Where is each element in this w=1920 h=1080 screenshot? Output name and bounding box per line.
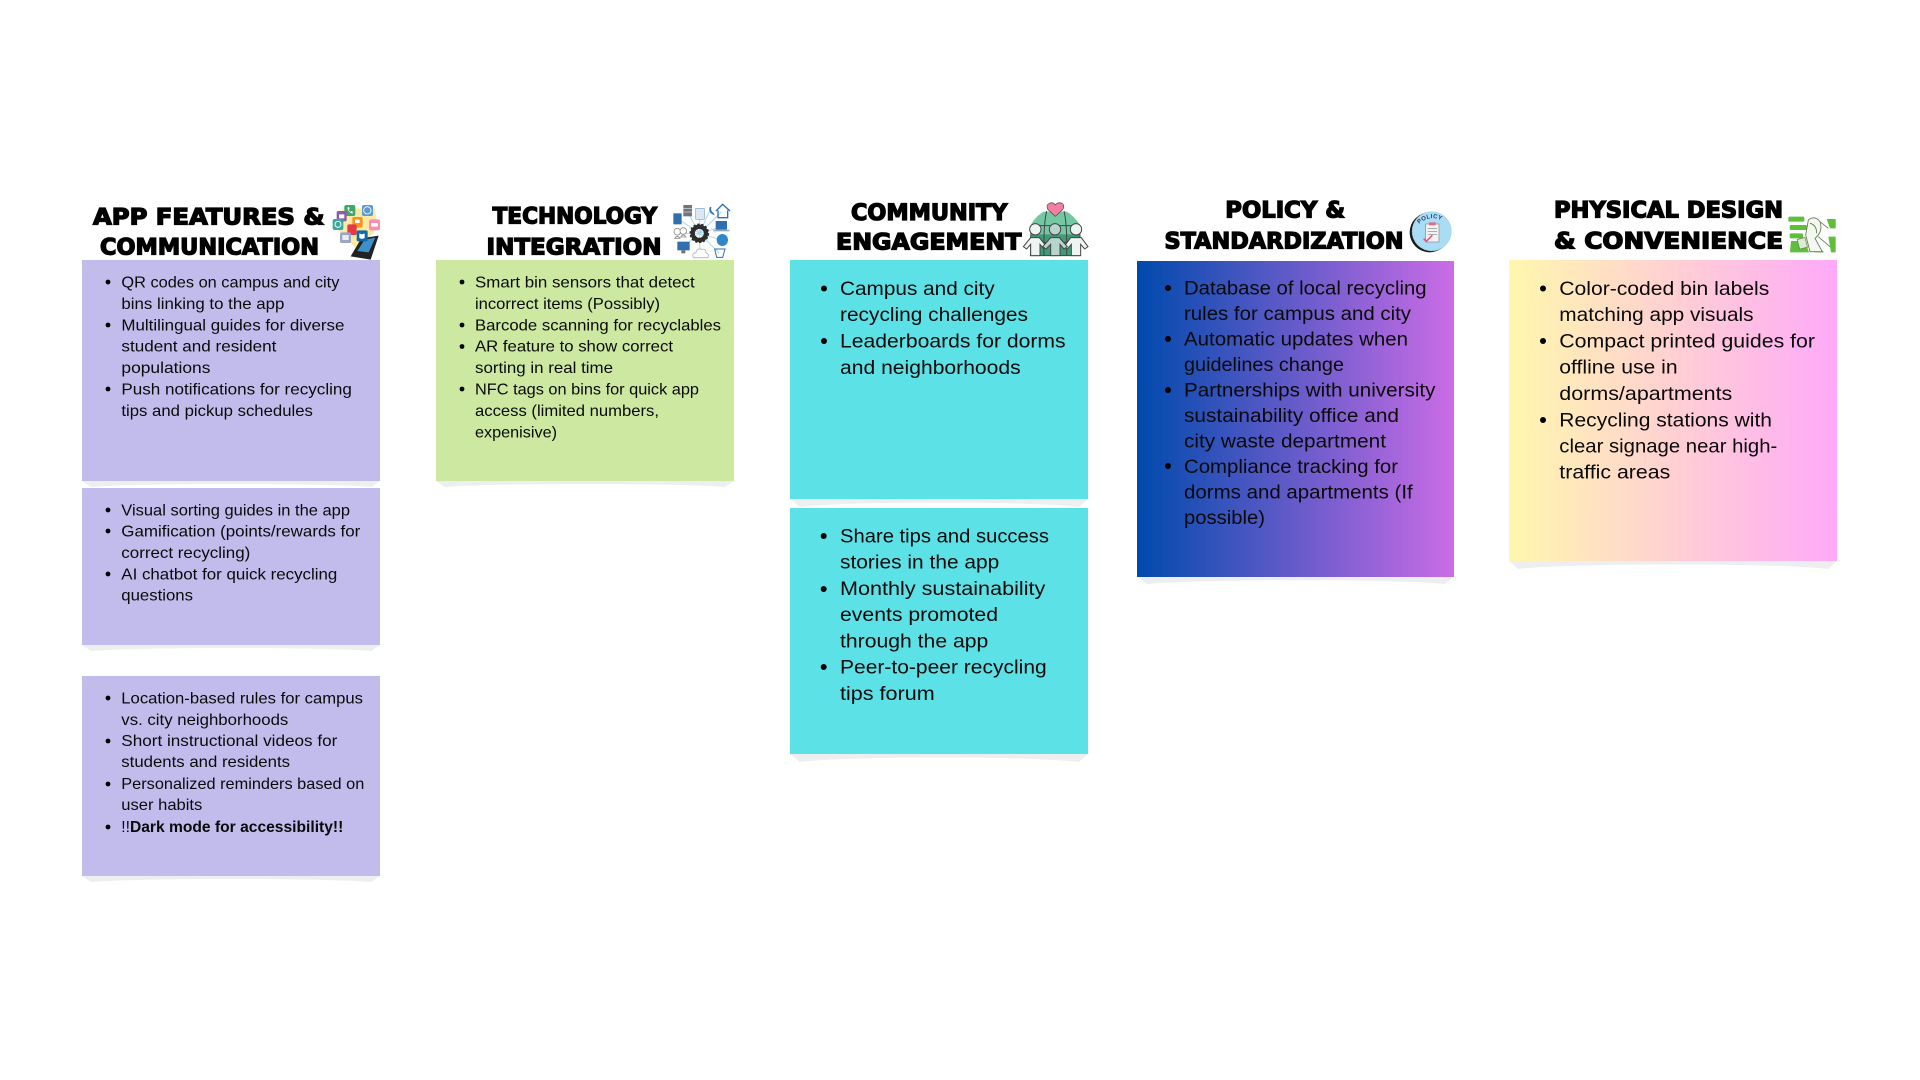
bullet list: Color-coded bin labels — [1559, 278, 1770, 300]
panel: technology integration card — [436, 260, 734, 487]
bullet list: and neighborhoods — [840, 357, 1021, 379]
bullet list: user habits — [121, 797, 202, 814]
panel: app features card 3 — [82, 676, 380, 882]
bullet list: Recycling stations with — [1559, 409, 1772, 431]
icon: policy clipboard badge — [1410, 211, 1452, 252]
bullet list: AI chatbot for quick recycling — [121, 566, 337, 583]
column: community engagement — [790, 201, 1088, 762]
bullet list: Push notifications for recycling — [121, 382, 352, 398]
panel: app features card 2 — [82, 488, 380, 651]
bullet list: tips and pickup schedules — [121, 403, 313, 420]
heading: policy and standardization: STANDARDIZATION — [1164, 230, 1404, 255]
bullet list: clear signage near high- — [1559, 436, 1777, 458]
bullet list: Visual sorting guides in the app — [121, 502, 350, 519]
bullet list: NFC tags on bins for quick app — [475, 382, 699, 398]
bullet list: sorting in real time — [475, 360, 613, 377]
bullet list: city waste department — [1184, 430, 1387, 452]
bullet list: Compliance tracking for — [1184, 456, 1399, 478]
panel: policy card — [1137, 261, 1454, 584]
bullet list: Automatic updates when — [1184, 328, 1408, 350]
bullet list: possible) — [1184, 507, 1265, 529]
heading: community engagement: ENGAGEMENT — [836, 230, 1021, 255]
bullet list: sustainability office and — [1184, 405, 1399, 427]
heading: technology integration — [486, 204, 662, 261]
heading: app features and communication: APP FEATURES & — [93, 205, 324, 230]
bullet list: Short instructional videos for — [121, 733, 338, 750]
bullet list: stories in the app — [840, 552, 999, 574]
panel: community engagement card 1 — [790, 260, 1088, 507]
heading: community engagement — [836, 201, 1021, 255]
bullet list: rules for campus and city — [1184, 303, 1411, 325]
bullet list: expenisive) — [475, 424, 557, 441]
heading: app features and communication — [93, 205, 324, 261]
bullet list: matching app visuals — [1559, 304, 1754, 326]
panel: physical design card — [1509, 260, 1837, 569]
bullet list: Share tips and success — [840, 526, 1049, 548]
bullet list: recycling challenges — [840, 304, 1028, 326]
bullet list: offline use in — [1559, 357, 1678, 379]
icon: policy clipboard badge: POLICY — [1416, 214, 1442, 224]
bullet list: Peer-to-peer recycling — [840, 657, 1047, 679]
bullet list: Multilingual guides for diverse — [121, 317, 344, 334]
heading: community engagement: COMMUNITY — [851, 201, 1009, 226]
bullet list: correct recycling) — [121, 545, 250, 562]
bullet list: Smart bin sensors that detect — [475, 274, 695, 292]
bullet list — [821, 278, 1066, 379]
bullet list: vs. city neighborhoods — [121, 712, 288, 729]
heading: physical design and convenience — [1554, 198, 1783, 255]
bullet list: dorms and apartments (If — [1184, 481, 1413, 503]
bullet list: Leaderboards for dorms — [840, 331, 1066, 353]
bullet list: QR codes on campus and city — [121, 274, 339, 292]
column: physical design and convenience — [1509, 198, 1837, 569]
bullet list: populations — [121, 360, 210, 377]
column: app features and communication — [82, 205, 380, 882]
bullet list: Location-based rules for campus — [121, 690, 363, 707]
heading: technology integration: INTEGRATION — [486, 236, 662, 261]
bullet list — [106, 502, 361, 604]
icon: gear with connected devices — [673, 203, 730, 258]
bullet list: Personalized reminders based on — [121, 776, 364, 793]
bullet list: Campus and city — [840, 278, 995, 300]
bullet list: student and resident — [121, 339, 277, 356]
heading: physical design and convenience: PHYSICAL DESIGN — [1554, 198, 1783, 223]
icon: smartphone with app tiles — [332, 205, 380, 260]
bullet list: Gamification (points/rewards for — [121, 524, 361, 541]
icon: people holding hands under a dome with heart — [1022, 202, 1089, 256]
bullet list: through the app — [840, 631, 988, 653]
bullet list — [460, 274, 721, 441]
column: technology integration — [436, 204, 734, 487]
bullet list: access (limited numbers, — [475, 403, 659, 420]
bullet list — [106, 690, 364, 836]
icon: green illustration of person with speech bubbles — [1788, 216, 1836, 252]
heading: physical design and convenience: & CONVENIENCE — [1554, 230, 1783, 255]
bullet list: dorms/apartments — [1559, 383, 1733, 405]
heading: app features and communication: COMMUNICATION — [100, 236, 319, 261]
bullet list — [1540, 278, 1816, 484]
bullet list — [106, 274, 352, 420]
heading: technology integration: TECHNOLOGY — [492, 204, 658, 229]
bullet list: events promoted — [840, 604, 998, 626]
bullet list: !!Dark mode for accessibility!! — [121, 819, 343, 836]
heading: policy and standardization: POLICY & — [1225, 198, 1345, 223]
bullet list: guidelines change — [1184, 354, 1344, 376]
bullet list: Partnerships with university — [1184, 379, 1436, 401]
bullet list: traffic areas — [1559, 462, 1671, 484]
bullet list: Barcode scanning for recyclables — [475, 317, 721, 334]
bullet list: Compact printed guides for — [1559, 331, 1816, 353]
panel: app features card 1 — [82, 260, 380, 487]
bullet list: questions — [121, 588, 193, 604]
bullet list: incorrect items (Possibly) — [475, 296, 660, 313]
bullet list: bins linking to the app — [121, 296, 284, 313]
column: policy and standardization — [1137, 198, 1454, 584]
bullet list: AR feature to show correct — [475, 339, 674, 356]
bullet list — [1165, 277, 1436, 529]
panel: community engagement card 2 — [790, 508, 1088, 762]
heading: policy and standardization — [1164, 198, 1404, 255]
bullet list — [821, 526, 1049, 705]
bullet list: Database of local recycling — [1184, 277, 1427, 299]
bullet list: students and residents — [121, 754, 290, 771]
bullet list: Monthly sustainability — [840, 578, 1046, 600]
bullet list: tips forum — [840, 683, 935, 705]
